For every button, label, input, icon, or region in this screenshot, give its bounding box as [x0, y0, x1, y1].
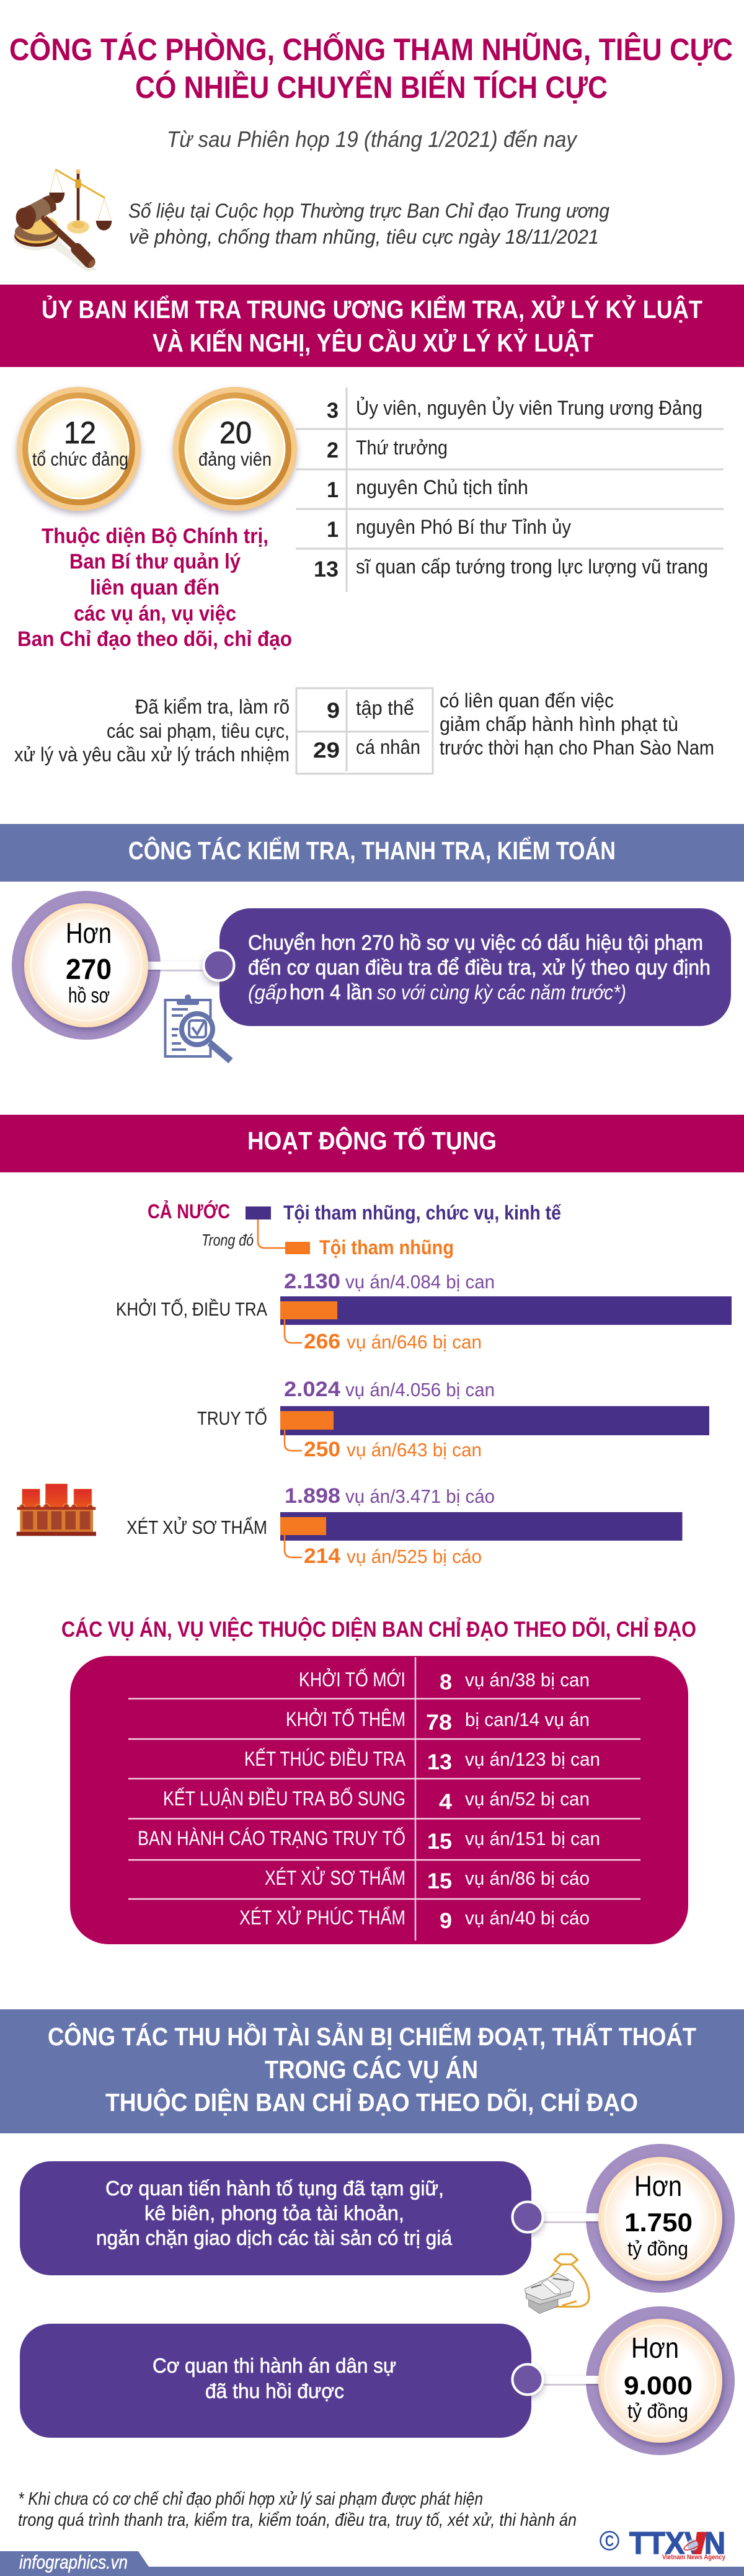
bar row: xét xử sơ thẩm: vụ án/525 bị cáo — [347, 1546, 482, 1567]
row: kết luận điều tra bổ sung: 4 — [439, 1790, 453, 1814]
circle: hơn 9.000 tỷ đồng: 9.000 — [624, 2371, 693, 2400]
legend — [148, 1200, 561, 1259]
row: xét xử sơ thẩm — [265, 1867, 590, 1893]
banner: Ủy ban Kiểm tra Trung ương — [0, 285, 744, 367]
panel: thi hành án: đã thu hồi được — [205, 2379, 344, 2402]
text block: thuộc diện: Thuộc diện Bộ Chính trị, — [42, 524, 268, 548]
text block: Phan Sào Nam: giảm chấp hành hình phạt tù — [440, 713, 678, 735]
legend: CẢ NƯỚC — [148, 1200, 230, 1223]
circle: 20 đảng viên: 20 — [219, 415, 252, 450]
bar row: xét xử sơ thẩm: vụ án/3.471 bị cáo — [345, 1485, 495, 1507]
circle: 12 tổ chức đảng — [17, 387, 141, 511]
row: 2 thứ trưởng — [327, 436, 448, 463]
table: tập thể và cá nhân: 9 — [327, 699, 340, 723]
panel: chuyển hồ sơ: hơn 4 lần — [290, 981, 373, 1004]
bar row: xét xử sơ thẩm — [126, 1484, 682, 1568]
circle: 20 đảng viên — [173, 387, 297, 511]
bar row: xét xử sơ thẩm: 214 — [304, 1544, 340, 1568]
banner: công tác kiểm tra — [0, 824, 744, 882]
row: xét xử phúc thẩm: XÉT XỬ PHÚC THẨM — [239, 1906, 405, 1929]
row: kết luận điều tra bổ sung — [163, 1787, 590, 1814]
panel: tạm giữ, kê biên: kê biên, phong tỏa tài khoản, — [144, 2202, 404, 2224]
text block: thuộc diện: liên quan đến — [90, 576, 219, 600]
circle: hơn 270 hồ sơ: 270 — [66, 953, 112, 985]
text block: đã kiểm tra: Đã kiểm tra, làm rõ — [135, 696, 290, 718]
row: 1 chủ tịch: 1 — [327, 478, 339, 502]
panel: bảng vụ án — [70, 1656, 688, 1944]
connector dot — [512, 2202, 543, 2232]
bar row: xét xử sơ thẩm: 1.898 — [285, 1484, 340, 1508]
row: 13 sĩ quan: 13 — [314, 557, 339, 582]
text block: đã kiểm tra: các sai phạm, tiêu cực, — [107, 720, 290, 742]
row: khởi tố thêm: KHỞI TỐ THÊM — [286, 1708, 405, 1730]
panel: chuyển hồ sơ: (gấp — [248, 981, 287, 1004]
circle: hơn 9.000 tỷ đồng — [539, 2306, 735, 2455]
banner: hoạt động tố tụng: HOẠT ĐỘNG TỐ TỤNG — [247, 1126, 497, 1155]
connector dot — [203, 950, 234, 981]
footer bar: infographics.vn — [19, 2551, 128, 2573]
row: xét xử phúc thẩm: 9 — [440, 1909, 452, 1933]
panel: thi hành án — [20, 2324, 531, 2438]
icon: clipboard with magnifier — [165, 994, 231, 1061]
bar row: khởi tố, điều tra: 2.130 — [284, 1270, 340, 1293]
logo: TTXVN: Vietnam News Agency — [662, 2554, 726, 2561]
bar row: khởi tố, điều tra: 266 — [304, 1330, 340, 1353]
row: 3 ủy viên: 3 — [327, 399, 339, 423]
footnote — [18, 2489, 577, 2530]
text block: thuộc diện — [17, 524, 292, 651]
bar row: truy tố: 2.024 — [284, 1378, 340, 1401]
row: xét xử phúc thẩm — [239, 1906, 590, 1933]
logo: TTXVN: C — [605, 2533, 614, 2550]
table: tập thể và cá nhân — [296, 688, 433, 774]
bar row: truy tố: 250 — [304, 1438, 340, 1461]
row: 2 thứ trưởng: 2 — [327, 438, 339, 463]
row: kết thúc điều tra: vụ án/123 bị can — [465, 1748, 600, 1770]
circle: hơn 1.750 tỷ đồng: Hơn — [634, 2170, 682, 2202]
row: khởi tố mới: KHỞI TỐ MỚI — [299, 1668, 405, 1691]
table: tập thể và cá nhân: cá nhân — [356, 736, 420, 758]
circle: 12 tổ chức đảng: 12 — [64, 415, 96, 450]
text block: đã kiểm tra: xử lý và yêu cầu xử lý trách nhiệm — [14, 743, 290, 766]
row: kết thúc điều tra — [244, 1748, 600, 1774]
circle: hơn 1.750 tỷ đồng: 1.750 — [624, 2208, 693, 2237]
subtitle: Từ sau Phiên họp 19 (tháng 1/2021) đến nay — [167, 126, 578, 152]
banner: thu hồi tài sản: THUỘC DIỆN BAN CHỈ ĐẠO THEO DÕI, CHỈ ĐẠO — [105, 2088, 638, 2117]
circle: hơn 270 hồ sơ: hồ sơ — [68, 984, 110, 1007]
row: kết thúc điều tra: KẾT THÚC ĐIỀU TRA — [244, 1748, 406, 1770]
circle: 12 tổ chức đảng: tổ chức đảng — [32, 448, 128, 470]
bar row: truy tố: vụ án/643 bị can — [347, 1439, 482, 1461]
row: ban hành cáo trạng: BAN HÀNH CÁO TRẠNG TRUY TỐ — [138, 1827, 405, 1849]
row: xét xử sơ thẩm: 15 — [427, 1869, 452, 1893]
legend: Trong đó — [202, 1231, 254, 1249]
circle: hơn 270 hồ sơ: Hơn — [66, 917, 112, 949]
banner: hoạt động tố tụng — [0, 1115, 744, 1172]
panel: chuyển hồ sơ: so với cùng kỳ các năm trước*) — [377, 981, 626, 1004]
bar row: khởi tố, điều tra: vụ án/646 bị can — [347, 1331, 482, 1353]
row: xét xử phúc thẩm: vụ án/40 bị cáo — [465, 1907, 590, 1929]
circle: hơn 270 hồ sơ — [12, 891, 205, 1040]
panel: chuyển hồ sơ: Chuyển hơn 270 hồ sơ vụ việc có dấu hiệu tội phạm — [248, 931, 703, 955]
row: 2 thứ trưởng: Thứ trưởng — [356, 436, 448, 459]
row: xét xử sơ thẩm: XÉT XỬ SƠ THẨM — [265, 1867, 405, 1889]
text block: thuộc diện: Ban Bí thư quản lý — [69, 550, 241, 573]
row: ban hành cáo trạng — [138, 1827, 600, 1854]
logo: TTXVN: TTXVN — [629, 2526, 725, 2561]
row: khởi tố thêm — [286, 1708, 590, 1735]
row: 1 chủ tịch: nguyên Chủ tịch tỉnh — [356, 476, 528, 498]
bar row: khởi tố, điều tra: KHỞI TỐ, ĐIỀU TRA — [116, 1298, 267, 1320]
text block: Phan Sào Nam: có liên quan đến việc — [440, 689, 614, 712]
title: CÓ NHIỀU CHUYỂN BIẾN TÍCH CỰC — [135, 70, 608, 105]
row: ban hành cáo trạng: vụ án/151 bị can — [465, 1828, 600, 1849]
text block: đã kiểm tra — [14, 696, 290, 766]
footnote: trong quá trình thanh tra, kiểm tra, kiểm toán, điều tra, truy tố, xét xử, thi hành án — [18, 2510, 577, 2530]
legend: Tội tham nhũng — [319, 1236, 454, 1259]
icon: court bench — [17, 1484, 96, 1536]
panel: tạm giữ, kê biên: Cơ quan tiến hành tố tụng đã tạm giữ, — [105, 2177, 444, 2200]
icon: gavel and scales — [12, 169, 112, 272]
note text: về phòng, chống tham nhũng, tiêu cực ngày 18/11/2021 — [129, 226, 599, 248]
row: 1 phó bí thư: 1 — [327, 518, 339, 542]
table: danh sách cán bộ — [296, 387, 724, 592]
row: xét xử sơ thẩm: vụ án/86 bị cáo — [465, 1867, 590, 1889]
bar row: truy tố — [197, 1378, 709, 1461]
icon: money bag — [525, 2254, 589, 2314]
connector dot — [512, 2365, 543, 2394]
row: kết thúc điều tra: 13 — [427, 1750, 452, 1774]
legend: Tội tham nhũng, chức vụ, kinh tế — [283, 1202, 561, 1224]
banner: thu hồi tài sản — [0, 2009, 744, 2133]
row: khởi tố mới: vụ án/38 bị can — [465, 1669, 590, 1691]
title — [9, 32, 733, 105]
circle: hơn 9.000 tỷ đồng: tỷ đồng — [627, 2400, 688, 2422]
row: 13 sĩ quan: sĩ quan cấp tướng trong lực lượng vũ trang — [356, 555, 708, 578]
row: khởi tố mới: 8 — [440, 1670, 452, 1694]
note text: Số liệu tại Cuộc họp Thường trực Ban Chỉ đạo Trung ương — [128, 200, 609, 222]
table: tập thể và cá nhân: 29 — [313, 738, 340, 763]
footer bar — [0, 2551, 744, 2576]
row: 3 ủy viên: Ủy viên, nguyên Ủy viên Trung ương Đảng — [356, 397, 702, 419]
text block: Phan Sào Nam: trước thời hạn cho Phan Sào Nam — [440, 737, 714, 759]
text block: Phan Sào Nam — [440, 689, 714, 759]
row: kết luận điều tra bổ sung: KẾT LUẬN ĐIỀU TRA BỔ SUNG — [163, 1787, 405, 1810]
note text — [128, 200, 609, 248]
bar row: khởi tố, điều tra: vụ án/4.084 bị can — [345, 1271, 495, 1293]
panel: chuyển hồ sơ — [219, 908, 731, 1026]
circle: hơn 9.000 tỷ đồng: Hơn — [631, 2332, 679, 2364]
panel: chuyển hồ sơ: đến cơ quan điều tra để điều tra, xử lý theo quy định — [248, 956, 711, 980]
row: khởi tố thêm: bị can/14 vụ án — [465, 1709, 590, 1730]
row: ban hành cáo trạng: 15 — [427, 1830, 452, 1854]
panel: thi hành án: Cơ quan thi hành án dân sự — [153, 2354, 396, 2377]
bar row: truy tố: TRUY TỐ — [197, 1407, 267, 1429]
text block: thuộc diện: Ban Chỉ đạo theo dõi, chỉ đạo — [17, 627, 292, 651]
text block: thuộc diện: các vụ án, vụ việc — [74, 602, 236, 626]
circle: hơn 1.750 tỷ đồng: tỷ đồng — [627, 2237, 688, 2260]
row: khởi tố thêm: 78 — [426, 1711, 452, 1735]
bar row: khởi tố, điều tra — [116, 1270, 732, 1353]
circle: hơn 1.750 tỷ đồng — [539, 2144, 735, 2293]
banner: Ủy ban Kiểm tra Trung ương: VÀ KIẾN NGHỊ, YÊU CẦU XỬ LÝ KỶ LUẬT — [153, 329, 593, 357]
row: 1 phó bí thư: nguyên Phó Bí thư Tỉnh ủy — [356, 516, 571, 538]
bar row: truy tố: vụ án/4.056 bị can — [345, 1379, 495, 1401]
row: kết luận điều tra bổ sung: vụ án/52 bị can — [465, 1788, 590, 1810]
footnote: * Khi chưa có cơ chế chỉ đạo phối hợp xử lý sai phạm được phát hiện — [18, 2489, 483, 2509]
banner: thu hồi tài sản: TRONG CÁC VỤ ÁN — [265, 2055, 478, 2084]
table: tập thể và cá nhân: tập thể — [356, 697, 414, 719]
circle: 20 đảng viên: đảng viên — [198, 448, 272, 470]
panel: tạm giữ, kê biên — [20, 2161, 531, 2275]
bar row: xét xử sơ thẩm: XÉT XỬ SƠ THẨM — [126, 1516, 267, 1538]
row: khởi tố mới — [299, 1668, 590, 1694]
panel: tạm giữ, kê biên: ngăn chặn giao dịch các tài sản có trị giá — [96, 2226, 453, 2249]
banner: công tác kiểm tra: CÔNG TÁC KIỂM TRA, THANH TRA, KIỂM TOÁN — [128, 836, 616, 865]
